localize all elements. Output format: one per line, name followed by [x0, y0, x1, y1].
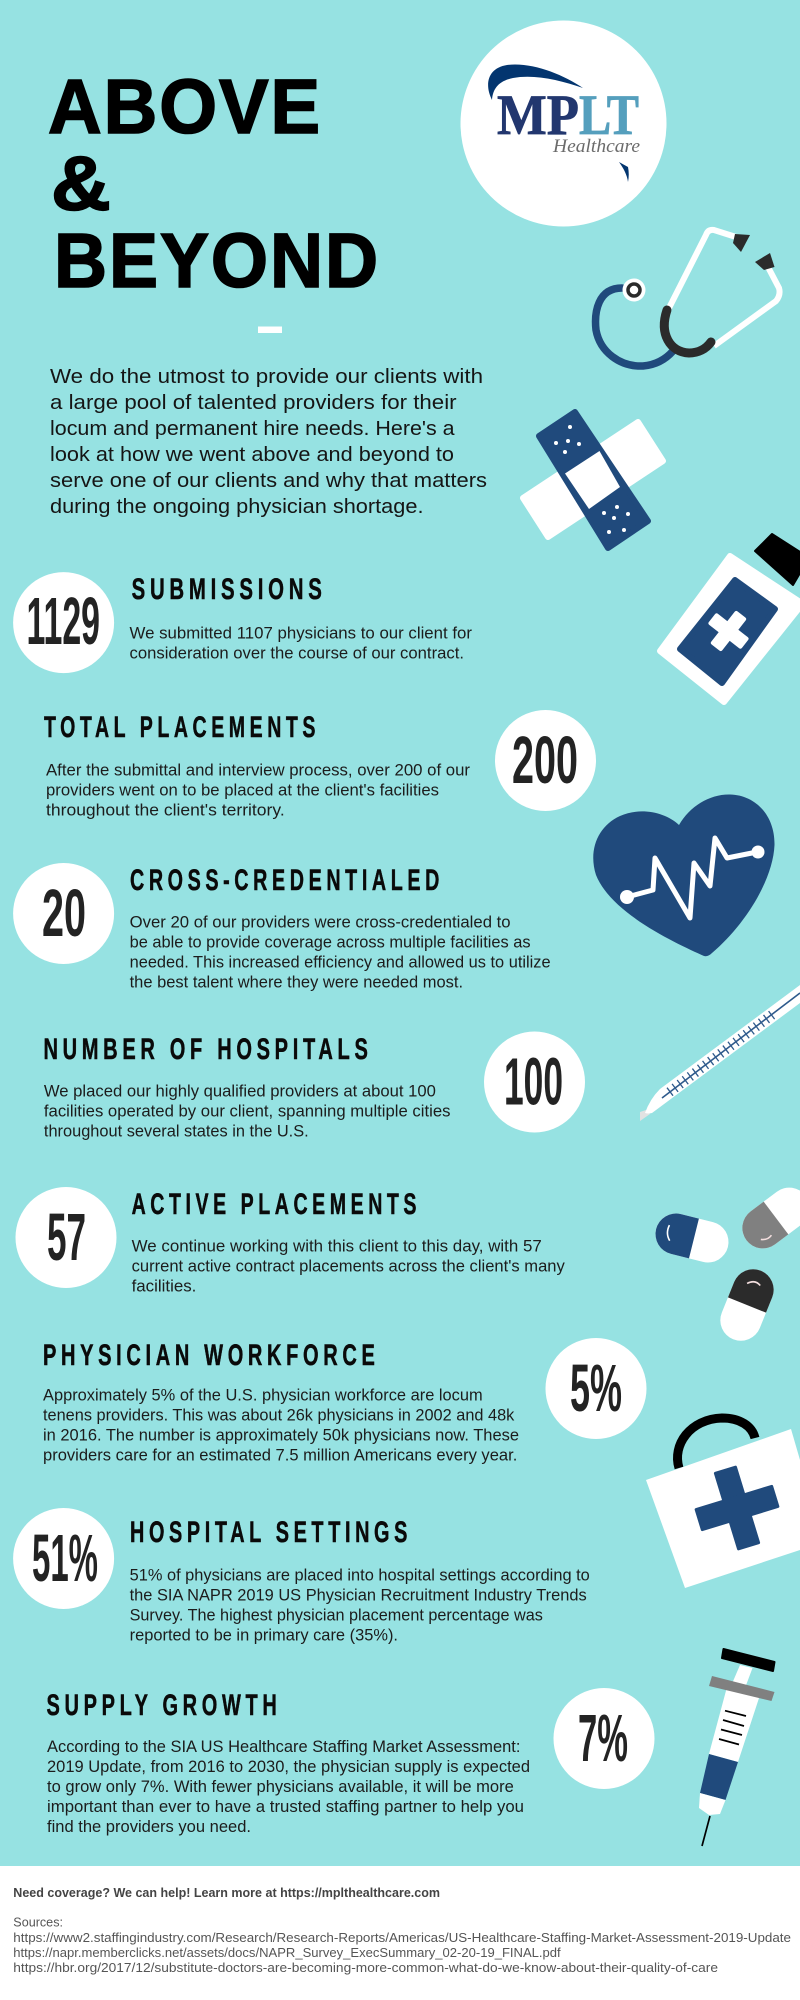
- number badge: 7%: [554, 1688, 654, 1789]
- number badge: 7%: 7%: [578, 1701, 628, 1776]
- logo: MPLT Healthcare: Healthcare: [552, 136, 640, 157]
- title: BEYOND: [54, 218, 380, 304]
- panel: total placements: [44, 710, 596, 820]
- heading: supply growth: SUPPLY GROWTH: [46, 1689, 282, 1722]
- logo: MPLT Healthcare: MP: [497, 84, 579, 147]
- number badge: 57: [16, 1187, 116, 1288]
- icon: heart with pulse: [593, 794, 775, 956]
- body: total placements: [46, 761, 471, 820]
- title: [48, 64, 380, 304]
- panel: number of hospitals: [44, 1032, 585, 1141]
- heading: physician workforce: PHYSICIAN WORKFORCE: [43, 1339, 380, 1372]
- body: supply growth: [47, 1738, 530, 1836]
- body: physician workforce: [43, 1386, 519, 1464]
- body: physician workforce: tenens providers. This was about 26k physicians in 2002 and 48k: [43, 1406, 515, 1424]
- body: submissions: We submitted 1107 physicians to our client for: [130, 624, 473, 642]
- heading: total placements: TOTAL PLACEMENTS: [44, 711, 320, 744]
- body: supply growth: to grow only 7%. With fewer physicians available, it will be more: [47, 1778, 514, 1796]
- body: supply growth: find the providers you need.: [47, 1818, 251, 1836]
- text block: introduction: serve one of our clients and why that matters: [50, 469, 487, 492]
- body: hospital settings: Survey. The highest physician placement percentage was: [130, 1606, 543, 1624]
- sources: https://www2.staffingindustry.com/Research/Research-Reports/Americas/US-Healthcare-Staffing-Market-Assessment-2019-Update: [13, 1931, 791, 1945]
- heading: submissions: SUBMISSIONS: [132, 573, 327, 606]
- number badge: 200: 200: [512, 723, 578, 798]
- call to action: Need coverage? We can help! Learn more at https://mplthealthcare.com: [13, 1886, 440, 1900]
- body: active placements: We continue working with this client to this day, with 57: [132, 1237, 542, 1255]
- panel: submissions: [13, 572, 473, 673]
- icon: thermometer: [640, 985, 800, 1121]
- body: physician workforce: in 2016. The number is approximately 50k physicians now. These: [43, 1426, 519, 1444]
- heading: number of hospitals: NUMBER OF HOSPITALS: [44, 1033, 372, 1066]
- icon: pills: [651, 1179, 800, 1347]
- body: physician workforce: Approximately 5% of the U.S. physician workforce are locum: [43, 1386, 483, 1404]
- body: number of hospitals: throughout several states in the U.S.: [44, 1123, 309, 1141]
- number badge: 200: [495, 710, 596, 811]
- number badge: 5%: 5%: [570, 1351, 622, 1426]
- number badge: 51%: [13, 1508, 114, 1609]
- body: hospital settings: the SIA NAPR 2019 US Physician Recruitment Industry Trends: [130, 1586, 587, 1604]
- icon: medicine bottle: [660, 534, 800, 702]
- panel: supply growth: [46, 1688, 654, 1836]
- body: number of hospitals: [44, 1082, 450, 1141]
- text block: introduction: locum and permanent hire needs. Here's a: [50, 417, 455, 440]
- body: hospital settings: [130, 1566, 590, 1644]
- icon: stethoscope: [596, 230, 780, 366]
- number badge: 100: 100: [504, 1044, 563, 1120]
- icon: syringe: [699, 1649, 774, 1846]
- body: total placements: providers went on to be placed at the client's facilities: [46, 781, 439, 799]
- body: hospital settings: reported to be in primary care (35%).: [130, 1626, 398, 1644]
- text block: introduction: [50, 365, 487, 518]
- body: cross-credentialed: [130, 913, 551, 992]
- text block: introduction: look at how we went above and beyond to: [50, 443, 454, 466]
- number badge: 20: [13, 863, 114, 964]
- number badge: 51%: 51%: [32, 1521, 98, 1596]
- heading: cross-credentialed: CROSS-CREDENTIALED: [130, 864, 444, 897]
- body: cross-credentialed: the best talent where they were needed most.: [130, 974, 463, 992]
- heading: hospital settings: HOSPITAL SETTINGS: [130, 1516, 412, 1549]
- body: cross-credentialed: Over 20 of our providers were cross-credentialed to: [130, 913, 511, 931]
- body: cross-credentialed: be able to provide coverage across multiple facilities as: [130, 934, 531, 952]
- logo: MPLT Healthcare: LT: [579, 84, 639, 147]
- body: supply growth: important than ever to have a trusted staffing partner to help you: [47, 1798, 524, 1816]
- text block: introduction: a large pool of talented providers for their: [50, 391, 457, 414]
- body: number of hospitals: We placed our highly qualified providers at about 100: [44, 1082, 436, 1100]
- body: submissions: [130, 624, 473, 663]
- body: supply growth: According to the SIA US Healthcare Staffing Market Assessment:: [47, 1738, 520, 1756]
- body: physician workforce: providers care for an estimated 7.5 million Americans every year.: [43, 1446, 517, 1464]
- number badge: 1129: 1129: [26, 584, 100, 659]
- title: &: [51, 141, 113, 227]
- number badge: 20: 20: [42, 876, 86, 951]
- body: number of hospitals: facilities operated by our client, spanning multiple cities: [44, 1102, 450, 1120]
- sources: https://napr.memberclicks.net/assets/docs/NAPR_Survey_ExecSummary_02-20-19_FINAL.pdf: [13, 1946, 561, 1960]
- sources: Sources:: [13, 1916, 63, 1930]
- body: cross-credentialed: needed. This increased efficiency and allowed us to utilize: [130, 954, 551, 972]
- number badge: 100: [484, 1032, 585, 1132]
- body: total placements: throughout the client's territory.: [46, 802, 285, 820]
- body: total placements: After the submittal and interview process, over 200 of our: [46, 761, 471, 779]
- icon: bandage: [523, 412, 663, 548]
- heading: active placements: ACTIVE PLACEMENTS: [132, 1188, 421, 1221]
- panel: active placements: [16, 1187, 566, 1295]
- panel: cross-credentialed: [13, 863, 551, 992]
- number badge: 57: 57: [47, 1200, 86, 1275]
- panel: footer: [0, 1866, 800, 2000]
- panel: hospital settings: [13, 1508, 590, 1644]
- title: ABOVE: [48, 64, 322, 150]
- logo: MPLT Healthcare: [460, 20, 666, 226]
- body: active placements: current active contract placements across the client's many: [132, 1257, 566, 1275]
- text block: introduction: during the ongoing physician shortage.: [50, 495, 424, 518]
- body: active placements: [132, 1237, 566, 1295]
- sources: [13, 1916, 791, 1975]
- panel: physician workforce: [43, 1338, 646, 1464]
- text block: introduction: We do the utmost to provide our clients with: [50, 365, 483, 388]
- icon: medical bag: [646, 1418, 800, 1588]
- sources: https://hbr.org/2017/12/substitute-doctors-are-becoming-more-common-what-do-we-know-about-their-quality-of-care: [13, 1961, 718, 1975]
- body: active placements: facilities.: [132, 1277, 196, 1295]
- body: supply growth: 2019 Update, from 2016 to 2030, the physician supply is expected: [47, 1758, 530, 1776]
- body: submissions: consideration over the course of our contract.: [130, 645, 464, 663]
- body: hospital settings: 51% of physicians are placed into hospital settings according to: [130, 1566, 590, 1584]
- number badge: 1129: [13, 572, 114, 673]
- number badge: 5%: [546, 1338, 646, 1439]
